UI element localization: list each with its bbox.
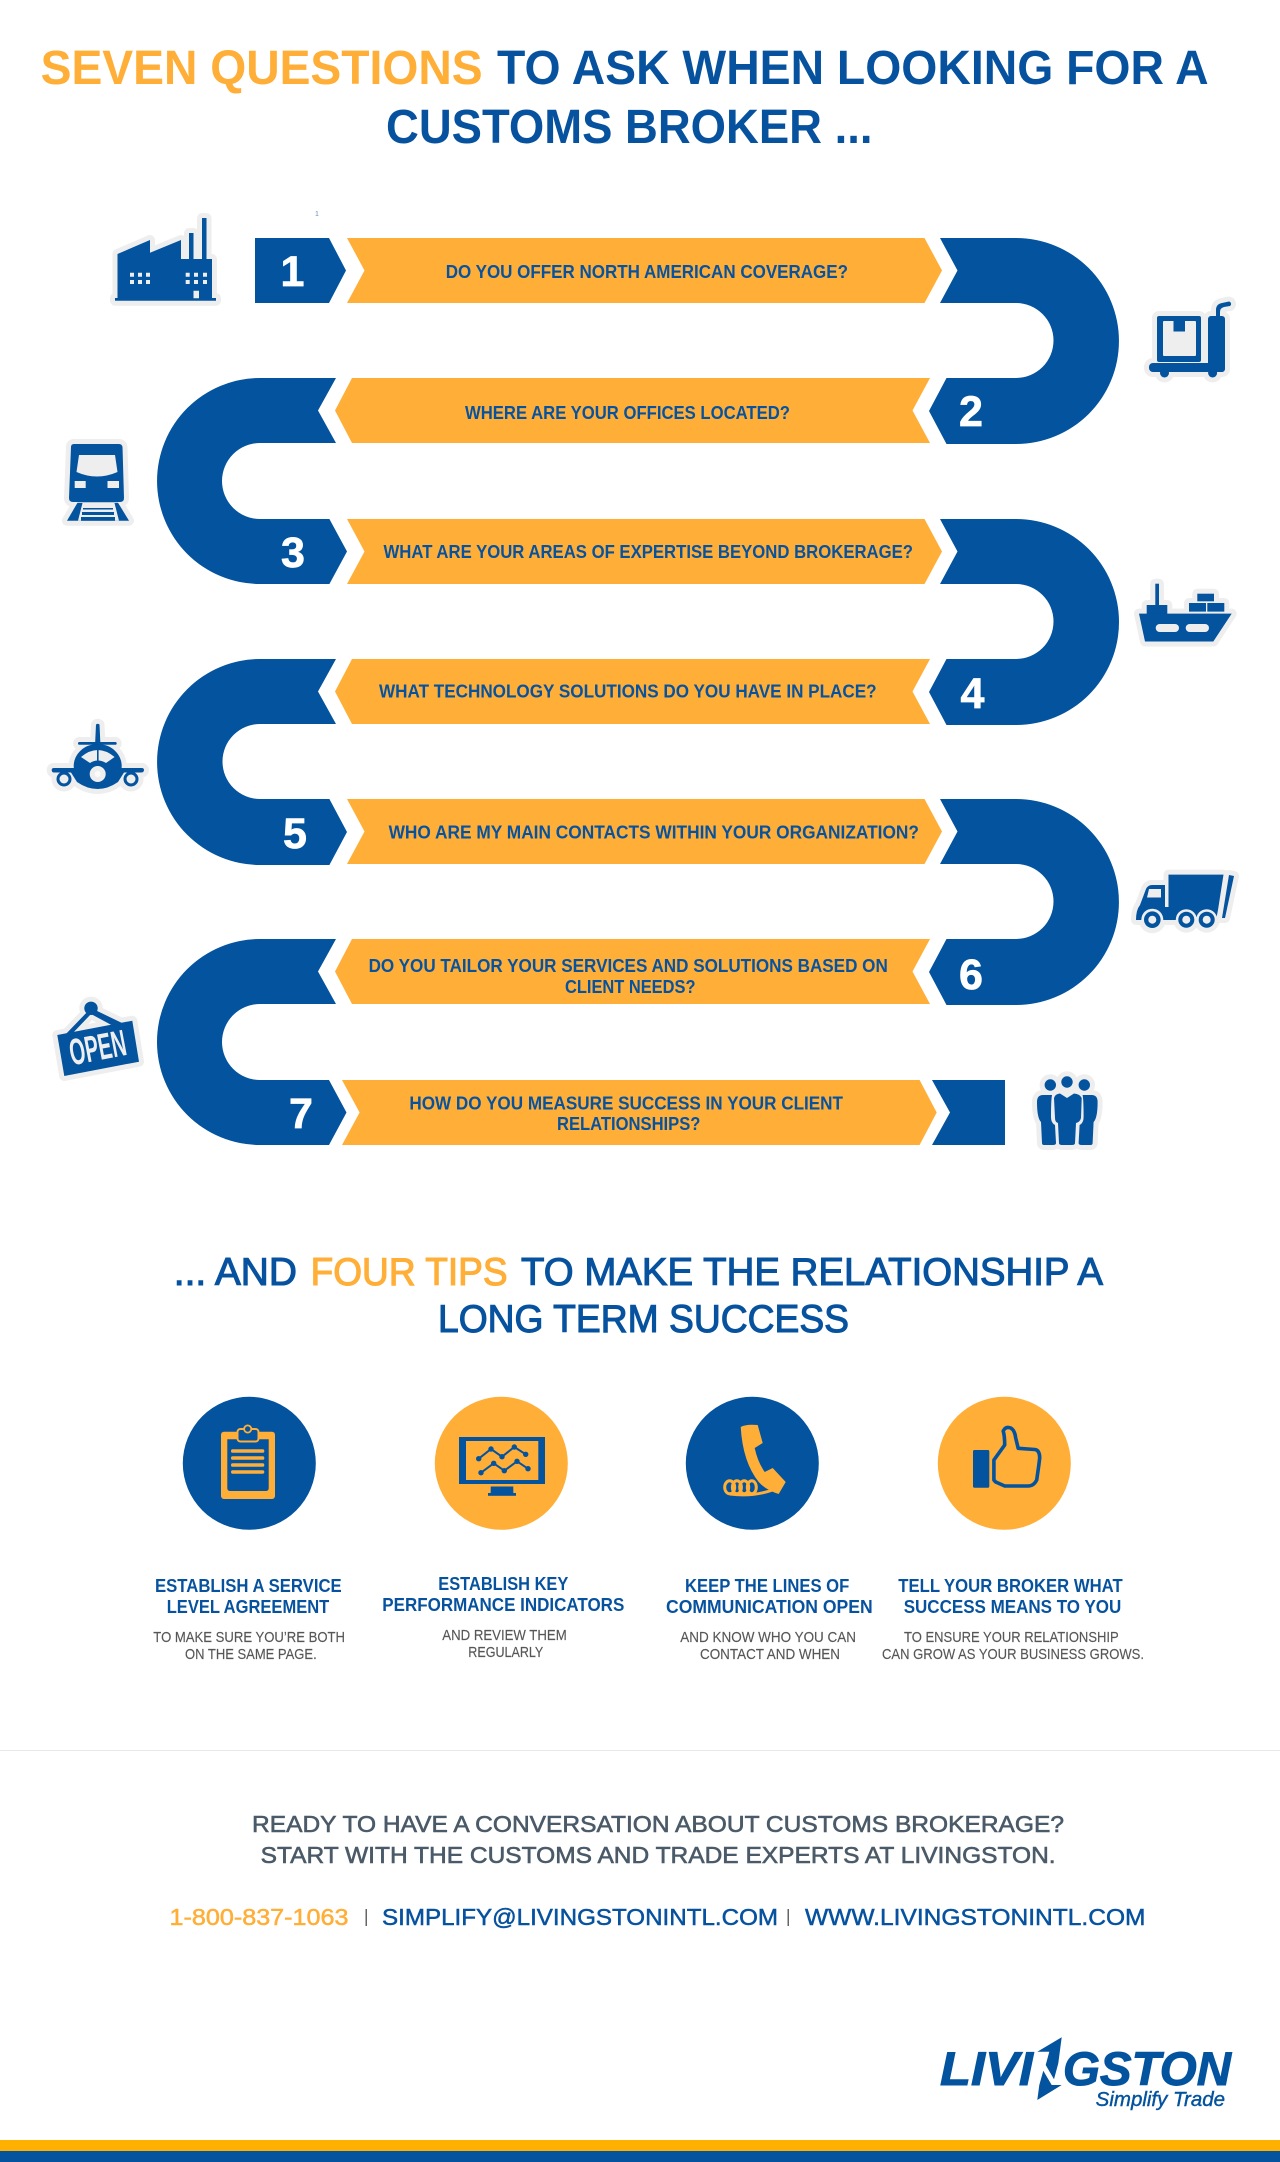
panel: tip 3 lines of communication: COMMUNICATION OPEN bbox=[666, 1596, 873, 1617]
panel: tip 2 key performance indicators: PERFORMANCE INDICATORS bbox=[382, 1594, 624, 1615]
logo: Livingston: GSTON bbox=[1063, 2042, 1232, 2095]
panel: tip 1 service level agreement: ESTABLISH A SERVICE bbox=[155, 1575, 342, 1596]
panel: tip 3 lines of communication: CONTACT AND WHEN bbox=[700, 1646, 840, 1663]
panel: tip 1 service level agreement: TO MAKE SURE YOU’RE BOTH bbox=[153, 1629, 345, 1646]
path segment 5: left curve bbox=[157, 659, 347, 865]
icon: airplane bbox=[52, 724, 144, 789]
path segment 5: left curve: 5 bbox=[283, 810, 307, 858]
path segment 3: left curve bbox=[157, 378, 347, 584]
call to action text bbox=[252, 1811, 1064, 1868]
panel: tip 2 key performance indicators: REGULARLY bbox=[468, 1644, 543, 1661]
call to action text: START WITH THE CUSTOMS AND TRADE EXPERTS AT LIVINGSTON. bbox=[261, 1842, 1056, 1868]
panel: tip 4 define success: SUCCESS MEANS TO YOU bbox=[904, 1596, 1121, 1617]
icon: factory bbox=[115, 218, 216, 301]
panel: tip 2 key performance indicators: AND REVIEW THEM bbox=[442, 1627, 567, 1644]
heading: ellipsis and AND: ... AND bbox=[174, 1251, 297, 1294]
path segment 6: right curve: 6 bbox=[959, 951, 983, 999]
icon: hand cart with box bbox=[1149, 302, 1231, 378]
icon: clipboard bbox=[183, 1397, 316, 1530]
question 6 ribbon: DO YOU TAILOR YOUR SERVICES AND SOLUTIONS BASED ON bbox=[369, 956, 888, 976]
question 3 ribbon: WHAT ARE YOUR AREAS OF EXPERTISE BEYOND BROKERAGE? bbox=[384, 542, 913, 562]
title: orange emphasis: SEVEN QUESTIONS bbox=[41, 42, 483, 95]
title bbox=[41, 42, 1209, 154]
panel: tip 4 define success: CAN GROW AS YOUR BUSINESS GROWS. bbox=[882, 1646, 1144, 1663]
logo: Livingston: Simplify Trade bbox=[1096, 2089, 1225, 2111]
question 6 ribbon bbox=[335, 939, 930, 1004]
path segment 6: right curve bbox=[929, 799, 1119, 1005]
question 1 ribbon bbox=[347, 238, 942, 303]
heading: four tips bbox=[174, 1251, 1103, 1341]
panel: winding question path bbox=[157, 238, 1119, 1145]
panel: tip 3 lines of communication: AND KNOW WHO YOU CAN bbox=[680, 1629, 856, 1646]
email address: SIMPLIFY@LIVINGSTONINTL.COM bbox=[382, 1904, 778, 1930]
path segment 1: number block: 1 bbox=[281, 248, 304, 296]
question 4 ribbon: WHAT TECHNOLOGY SOLUTIONS DO YOU HAVE IN PLACE? bbox=[379, 682, 877, 702]
logo: Livingston: LIVI bbox=[940, 2042, 1034, 2095]
question 7 ribbon bbox=[342, 1080, 937, 1145]
path segment 3: left curve: 3 bbox=[281, 529, 305, 577]
heading: first line remainder: TO MAKE THE RELATIONSHIP A bbox=[521, 1251, 1103, 1294]
call to action text: READY TO HAVE A CONVERSATION ABOUT CUSTOMS BROKERAGE? bbox=[252, 1811, 1064, 1837]
path segment 7: left curve: 7 bbox=[289, 1090, 313, 1138]
panel: tip 4 define success: TELL YOUR BROKER WHAT bbox=[898, 1575, 1123, 1596]
panel: tip 4 define success bbox=[882, 1397, 1144, 1663]
question 2 ribbon bbox=[335, 378, 930, 443]
phone number: 1-800-837-1063 bbox=[170, 1904, 348, 1930]
path segment 4: right curve bbox=[929, 519, 1119, 725]
question 1 ribbon: DO YOU OFFER NORTH AMERICAN COVERAGE? bbox=[446, 262, 848, 282]
footer bars bbox=[0, 2140, 1280, 2162]
panel: tip 1 service level agreement bbox=[153, 1397, 345, 1663]
path segment 2: right curve bbox=[929, 238, 1119, 444]
path segment 7: left curve bbox=[157, 939, 346, 1145]
panel: tip 1 service level agreement: ON THE SAME PAGE. bbox=[185, 1646, 317, 1663]
icon: delivery truck bbox=[1136, 875, 1234, 931]
path end block bbox=[932, 1080, 1005, 1145]
icon: train bbox=[67, 444, 129, 521]
panel: tip 3 lines of communication bbox=[666, 1397, 873, 1663]
website: WWW.LIVINGSTONINTL.COM bbox=[805, 1904, 1146, 1930]
question 6 ribbon: CLIENT NEEDS? bbox=[565, 977, 696, 997]
contact line bbox=[170, 1904, 1146, 1930]
icon: cargo ship bbox=[1139, 584, 1232, 642]
heading: second line: LONG TERM SUCCESS bbox=[438, 1298, 849, 1341]
panel: tip 2 key performance indicators: ESTABLISH KEY bbox=[438, 1573, 569, 1594]
path segment 4: right curve: 4 bbox=[961, 670, 985, 718]
question 2 ribbon: WHERE ARE YOUR OFFICES LOCATED? bbox=[465, 403, 790, 423]
icon: thumbs up bbox=[938, 1397, 1071, 1530]
question 3 ribbon bbox=[347, 519, 942, 584]
question 4 ribbon bbox=[335, 659, 930, 724]
icon: monitor with charts bbox=[435, 1397, 568, 1530]
tiny stray numeral mark: 1 bbox=[315, 211, 319, 218]
question 5 ribbon: WHO ARE MY MAIN CONTACTS WITHIN YOUR ORGANIZATION? bbox=[389, 822, 919, 842]
question 5 ribbon bbox=[347, 799, 942, 864]
icon: open sign bbox=[57, 1002, 139, 1076]
panel: tip 1 service level agreement: LEVEL AGREEMENT bbox=[167, 1596, 330, 1617]
path segment 1: number block bbox=[255, 238, 346, 303]
panel: tip 4 define success: TO ENSURE YOUR RELATIONSHIP bbox=[904, 1629, 1119, 1646]
title: second line: CUSTOMS BROKER ... bbox=[386, 101, 872, 154]
path segment 2: right curve: 2 bbox=[959, 388, 983, 436]
heading: orange emphasis: FOUR TIPS bbox=[311, 1251, 508, 1294]
title: first line remainder: TO ASK WHEN LOOKING FOR A bbox=[497, 42, 1209, 95]
icon: open sign: OPEN bbox=[66, 1022, 129, 1073]
panel: tip 2 key performance indicators bbox=[382, 1397, 624, 1661]
question 7 ribbon: RELATIONSHIPS? bbox=[557, 1114, 700, 1134]
icon: telephone handset bbox=[686, 1397, 819, 1530]
question 7 ribbon: HOW DO YOU MEASURE SUCCESS IN YOUR CLIENT bbox=[409, 1093, 843, 1113]
icon: group of people bbox=[1037, 1076, 1098, 1145]
logo: Livingston bbox=[940, 2037, 1232, 2111]
panel: tip 3 lines of communication: KEEP THE LINES OF bbox=[685, 1575, 849, 1596]
